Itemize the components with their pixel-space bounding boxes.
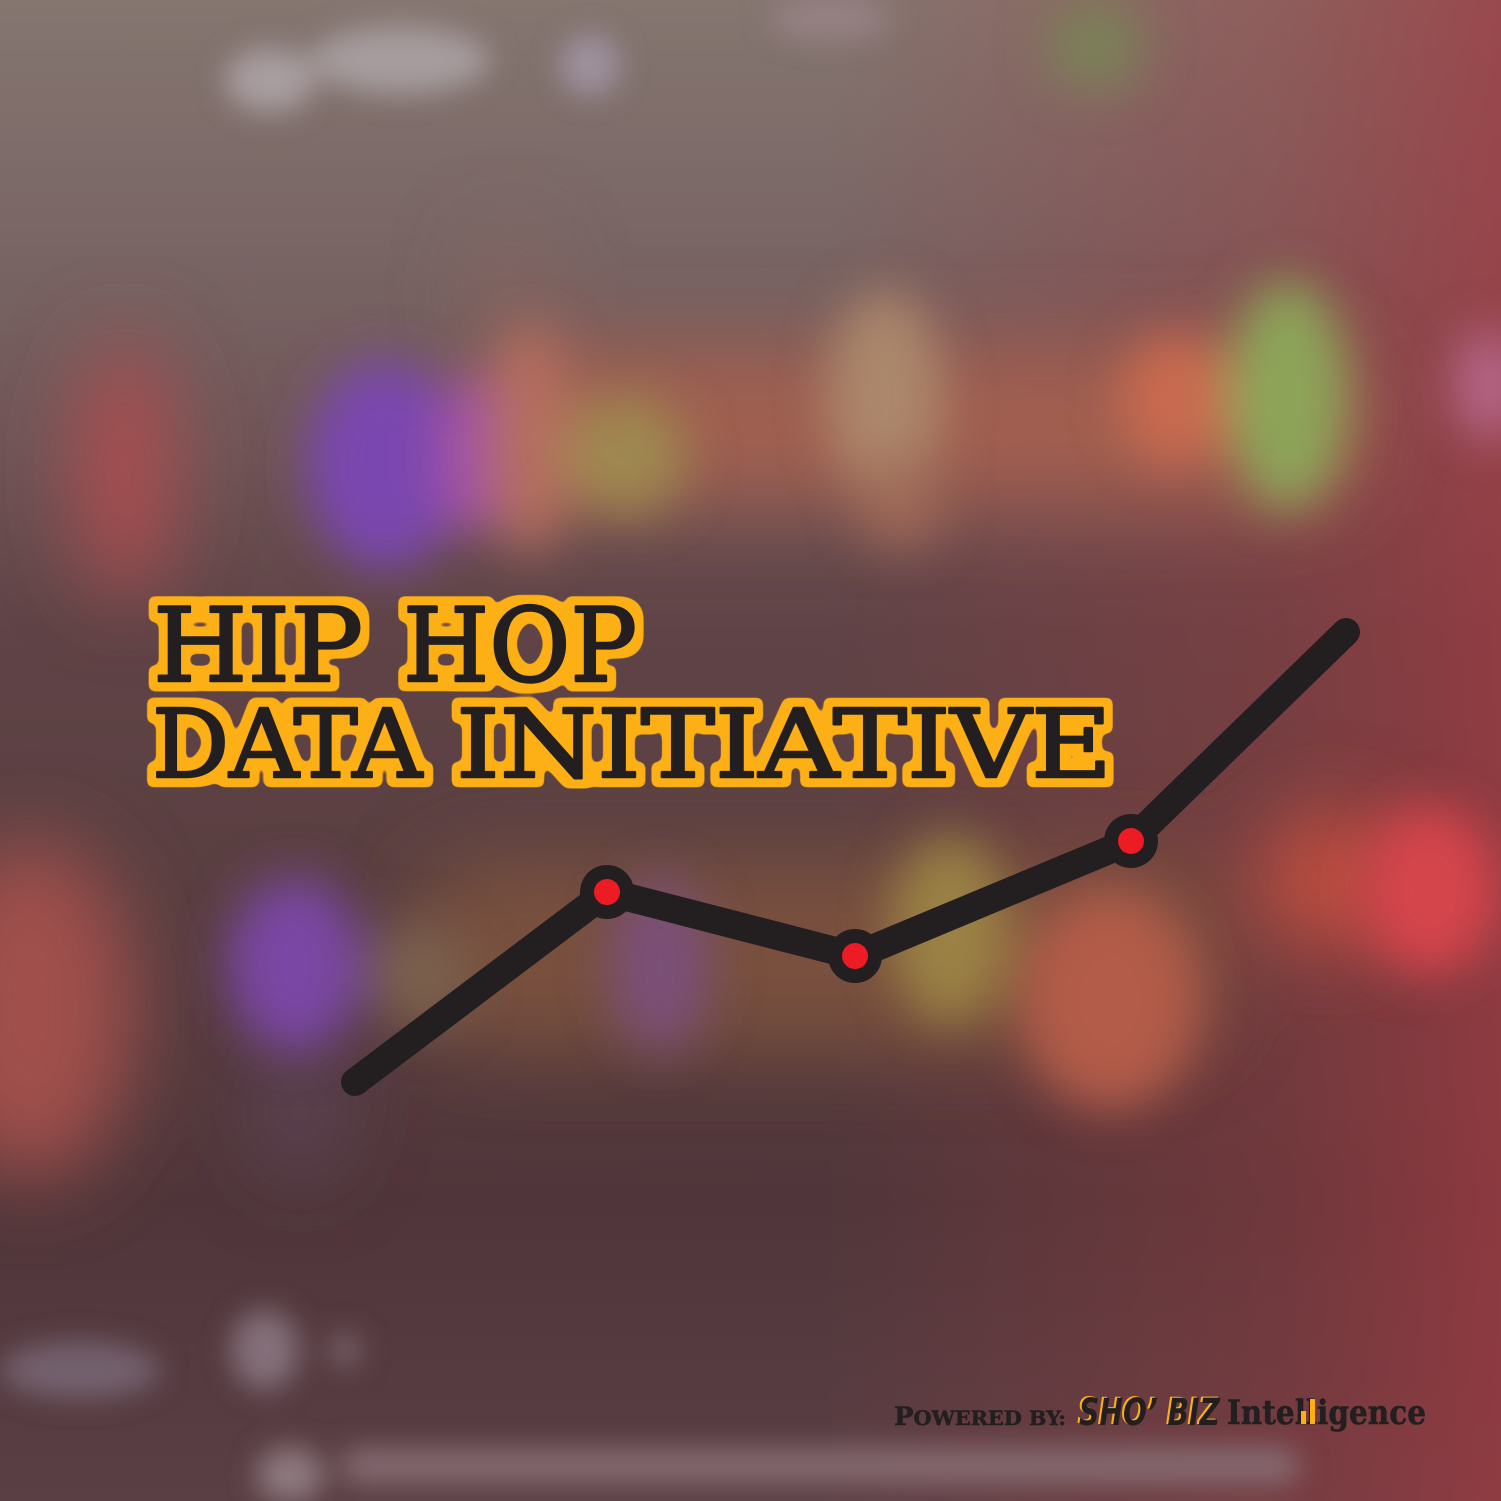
title line 1: HIP bbox=[153, 587, 363, 706]
powered by credit bbox=[894, 1391, 1426, 1434]
data point 1 bbox=[580, 865, 634, 919]
intelligence wordmark: Intelligence bbox=[1227, 1393, 1426, 1433]
sho' biz wordmark: SHO’ BIZ bbox=[1079, 1391, 1221, 1434]
powered by label: POWERED BY: bbox=[894, 1402, 1066, 1431]
data point 3 bbox=[1104, 814, 1158, 868]
data point 2 bbox=[828, 929, 882, 983]
title line 2: DATA bbox=[152, 690, 423, 800]
line chart bbox=[355, 632, 1346, 1082]
title bbox=[152, 587, 1112, 800]
intelligence bar accents bbox=[1301, 1399, 1315, 1424]
trend line bbox=[355, 632, 1346, 1082]
title line 2: INITIATIVE bbox=[456, 690, 1112, 800]
title line 1: HOP bbox=[403, 587, 637, 706]
